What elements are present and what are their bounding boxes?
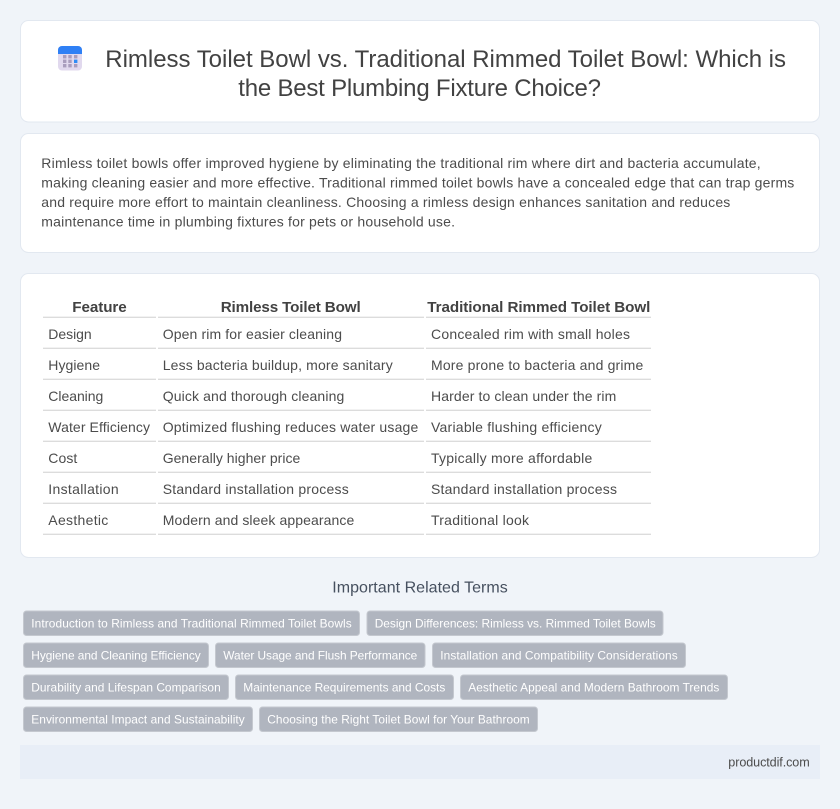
intro text: and require more effort to maintain cleanliness. Choosing a rimless design enhances sanitation and reduces xyxy=(41,194,730,210)
tag: introduction: Introduction to Rimless and Traditional Rimmed Toilet Bowls xyxy=(31,616,352,630)
tag: installation xyxy=(432,643,686,668)
intro text: making cleaning easier and more effective. Traditional rimmed toilet bowls have a concealed edge that can trap germs xyxy=(41,174,794,190)
row: water efficiency: Water Efficiency xyxy=(48,419,150,435)
row: aesthetic: Modern and sleek appearance xyxy=(163,512,355,528)
related term tags xyxy=(24,611,728,732)
icon: calendar xyxy=(58,46,82,70)
row: design: Concealed rim with small holes xyxy=(431,326,630,342)
heading: related terms: Important Related Terms xyxy=(332,580,508,596)
row: cost: Cost xyxy=(48,450,77,466)
row: installation: Installation xyxy=(48,481,119,497)
row: cost: Typically more affordable xyxy=(431,450,593,466)
tag: installation: Installation and Compatibility Considerations xyxy=(440,648,678,662)
intro text: maintenance time in plumbing fixtures for pets or household use. xyxy=(41,214,455,230)
row: design: Design xyxy=(48,326,92,342)
tag: design differences: Design Differences: Rimless vs. Rimmed Toilet Bowls xyxy=(375,616,656,630)
row: hygiene xyxy=(43,357,651,379)
tag: environmental impact xyxy=(24,707,252,732)
row: water efficiency: Optimized flushing reduces water usage xyxy=(163,419,419,435)
tag: introduction xyxy=(24,611,360,636)
row: aesthetic: Aesthetic xyxy=(48,512,108,528)
table header: Rimless Toilet Bowl xyxy=(221,299,361,316)
tag: choosing: Choosing the Right Toilet Bowl for Your Bathroom xyxy=(267,712,530,726)
row: hygiene: Less bacteria buildup, more sanitary xyxy=(163,357,393,373)
row: aesthetic: Traditional look xyxy=(431,512,530,528)
row: water efficiency xyxy=(43,419,651,441)
row: installation: Standard installation process xyxy=(431,481,617,497)
row: cost xyxy=(43,450,651,472)
row: cost: Generally higher price xyxy=(163,450,301,466)
intro text: Rimless toilet bowls offer improved hygiene by eliminating the traditional rim where dirt and bacteria accumulate, xyxy=(41,155,761,171)
row: cleaning: Quick and thorough cleaning xyxy=(163,388,344,404)
footer xyxy=(20,745,820,779)
title xyxy=(105,46,786,102)
tag: hygiene: Hygiene and Cleaning Efficiency xyxy=(31,648,201,662)
tag: aesthetic appeal xyxy=(460,675,728,700)
intro text xyxy=(41,155,794,230)
tag: maintenance xyxy=(236,675,454,700)
tag: aesthetic appeal: Aesthetic Appeal and Modern Bathroom Trends xyxy=(468,680,719,694)
tag: water usage: Water Usage and Flush Performance xyxy=(223,648,418,662)
row: aesthetic xyxy=(43,512,651,534)
row: design: Open rim for easier cleaning xyxy=(163,326,342,342)
tag: durability xyxy=(24,675,228,700)
row: hygiene: More prone to bacteria and grime xyxy=(431,357,644,373)
row: cleaning xyxy=(43,388,651,410)
tag: design differences xyxy=(367,611,663,636)
tag: maintenance: Maintenance Requirements and Costs xyxy=(243,680,445,694)
title: Rimless Toilet Bowl vs. Traditional Rimmed Toilet Bowl: Which is xyxy=(105,46,786,73)
panel: header xyxy=(20,20,820,122)
table header xyxy=(43,299,651,317)
panel: comparison table xyxy=(20,274,820,558)
tag: durability: Durability and Lifespan Comparison xyxy=(31,680,221,694)
row: cleaning: Cleaning xyxy=(48,388,103,404)
panel: introduction xyxy=(20,134,820,252)
tag: choosing xyxy=(260,707,538,732)
row: installation: Standard installation process xyxy=(163,481,349,497)
footer: productdif.com xyxy=(728,756,810,770)
row: hygiene: Hygiene xyxy=(48,357,100,373)
row: water efficiency: Variable flushing efficiency xyxy=(431,419,602,435)
tag: hygiene xyxy=(24,643,208,668)
tag: water usage xyxy=(216,643,425,668)
table header: Feature xyxy=(72,299,127,316)
row: cleaning: Harder to clean under the rim xyxy=(431,388,616,404)
row: installation xyxy=(43,481,651,503)
row: design xyxy=(43,326,651,348)
table header: Traditional Rimmed Toilet Bowl xyxy=(427,299,650,316)
title: the Best Plumbing Fixture Choice? xyxy=(238,75,601,102)
tag: environmental impact: Environmental Impact and Sustainability xyxy=(31,712,245,726)
